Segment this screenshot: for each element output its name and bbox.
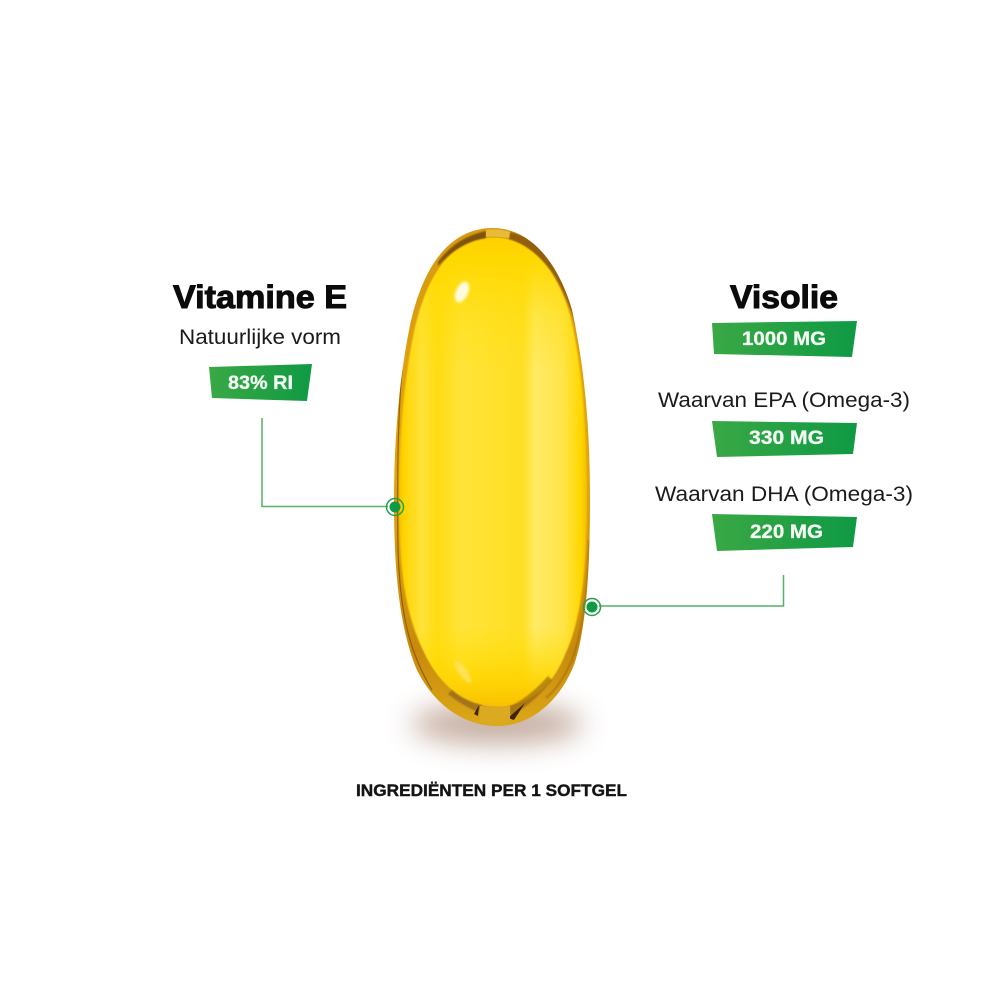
badge: 83% RI: 83% RI — [228, 373, 293, 394]
badge: 220 MG — [712, 514, 857, 551]
badge: 83% RI — [209, 364, 312, 401]
top rim light — [486, 229, 510, 238]
heading: Visolie: Visolie — [730, 279, 838, 315]
text: natural form: Natuurlijke vorm — [179, 326, 341, 349]
badge: 1000 MG: 1000 MG — [742, 329, 826, 350]
bottom rim fill — [480, 706, 510, 724]
footer caption: INGREDIËNTEN PER 1 SOFTGEL — [356, 781, 627, 800]
callout: fish oil — [655, 279, 913, 551]
heading: Vitamine E: Vitamine E — [173, 279, 347, 315]
connector: fish oil to capsule — [584, 575, 784, 616]
inner body — [399, 238, 587, 706]
callout: vitamin E — [173, 279, 347, 401]
text: EPA: Waarvan EPA (Omega-3) — [658, 389, 910, 412]
badge: 330 MG — [712, 421, 857, 457]
softgel capsule — [394, 228, 590, 726]
capsule drop shadow — [411, 704, 583, 744]
left rim dark line — [398, 350, 432, 690]
connector: vitamin E to capsule — [262, 418, 404, 516]
right rim dark line — [546, 540, 589, 698]
badge: 220 MG: 220 MG — [750, 522, 823, 543]
badge: 1000 MG — [712, 321, 857, 357]
badge: 330 MG: 330 MG — [749, 428, 824, 449]
bottom dark reflections — [448, 690, 482, 712]
lower-left glint — [452, 659, 474, 685]
text: DHA: Waarvan DHA (Omega-3) — [655, 483, 913, 506]
specular highlight — [452, 279, 472, 305]
top dark reflections — [438, 231, 486, 266]
